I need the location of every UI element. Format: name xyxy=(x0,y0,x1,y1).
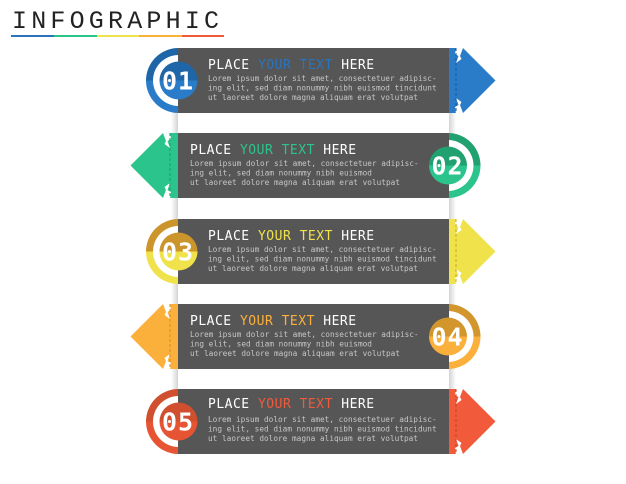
number 03: 03 xyxy=(162,238,194,266)
body text: ing elit, sed diam nonummy nibh euismod xyxy=(190,340,372,348)
title: INFOGRAPHIC xyxy=(12,7,223,36)
panel: step 04 xyxy=(130,303,480,370)
number 01: 01 xyxy=(162,66,194,96)
number 03 xyxy=(160,232,198,270)
body text xyxy=(208,245,437,273)
number 05 xyxy=(160,402,198,440)
number 05: 05 xyxy=(162,408,194,436)
bar xyxy=(178,304,449,369)
body text xyxy=(190,159,419,187)
body text: ing elit, sed diam nonummy nibh euismod tincidunt xyxy=(208,424,437,434)
panel: step 01 xyxy=(146,47,496,114)
body text xyxy=(208,415,437,443)
number 01 xyxy=(160,62,198,100)
heading: PLACE YOUR TEXT HERE xyxy=(208,58,375,73)
bar xyxy=(178,389,449,454)
arrow: left orange xyxy=(130,303,178,370)
number 04: 04 xyxy=(432,322,464,352)
heading: PLACE YOUR TEXT HERE xyxy=(208,397,375,412)
heading: PLACE YOUR TEXT HERE xyxy=(208,229,375,244)
number 04 xyxy=(429,318,467,356)
bar xyxy=(178,48,449,113)
icon: ring 03 xyxy=(146,219,211,284)
body text: Lorem ipsum dolor sit amet, consectetuer adipisc- xyxy=(208,245,437,254)
body text: Lorem ipsum dolor sit amet, consectetuer adipisc- xyxy=(208,415,437,424)
heading: PLACE YOUR TEXT HERE xyxy=(190,314,357,329)
number 02 xyxy=(429,146,467,184)
panel: step 02 xyxy=(130,132,480,199)
body text: ing elit, sed diam nonummy nibh euismod xyxy=(190,168,372,178)
body text: Lorem ipsum dolor sit amet, consectetuer adipisc- xyxy=(190,159,419,168)
body text: ut laoreet dolore magna aliquam erat volutpat xyxy=(190,349,400,358)
icon: ring 02 xyxy=(416,133,480,198)
body text: Lorem ipsum dolor sit amet, consectetuer adipisc- xyxy=(190,330,419,339)
body text: ing elit, sed diam nonummy nibh euismod tincidunt xyxy=(208,84,437,92)
bar xyxy=(178,219,449,284)
icon: ring 01 xyxy=(146,48,211,113)
body text: ing elit, sed diam nonummy nibh euismod tincidunt xyxy=(208,254,437,264)
body text: ut laoreet dolore magna aliquam erat volutpat xyxy=(208,264,418,273)
body text xyxy=(208,74,437,102)
body text: ut laoreet dolore magna aliquam erat volutpat xyxy=(190,178,400,187)
number 02: 02 xyxy=(432,152,464,180)
icon: ring 04 xyxy=(416,304,480,369)
body text: ut laoreet dolore magna aliquam erat volutpat xyxy=(208,434,418,443)
body text: ut laoreet dolore magna aliquam erat volutpat xyxy=(208,93,418,102)
arrow: left green xyxy=(130,132,178,199)
arrow: right yellow xyxy=(448,218,496,285)
panel: step 03 xyxy=(146,218,496,285)
title underline xyxy=(11,35,224,37)
icon: ring 05 xyxy=(146,389,211,454)
body text: Lorem ipsum dolor sit amet, consectetuer adipisc- xyxy=(208,74,437,83)
body text xyxy=(190,330,419,358)
bar xyxy=(178,133,449,198)
heading: PLACE YOUR TEXT HERE xyxy=(190,143,357,158)
arrow: right red xyxy=(448,388,496,455)
panel: step 05 xyxy=(146,388,496,455)
arrow: right blue xyxy=(448,47,496,114)
